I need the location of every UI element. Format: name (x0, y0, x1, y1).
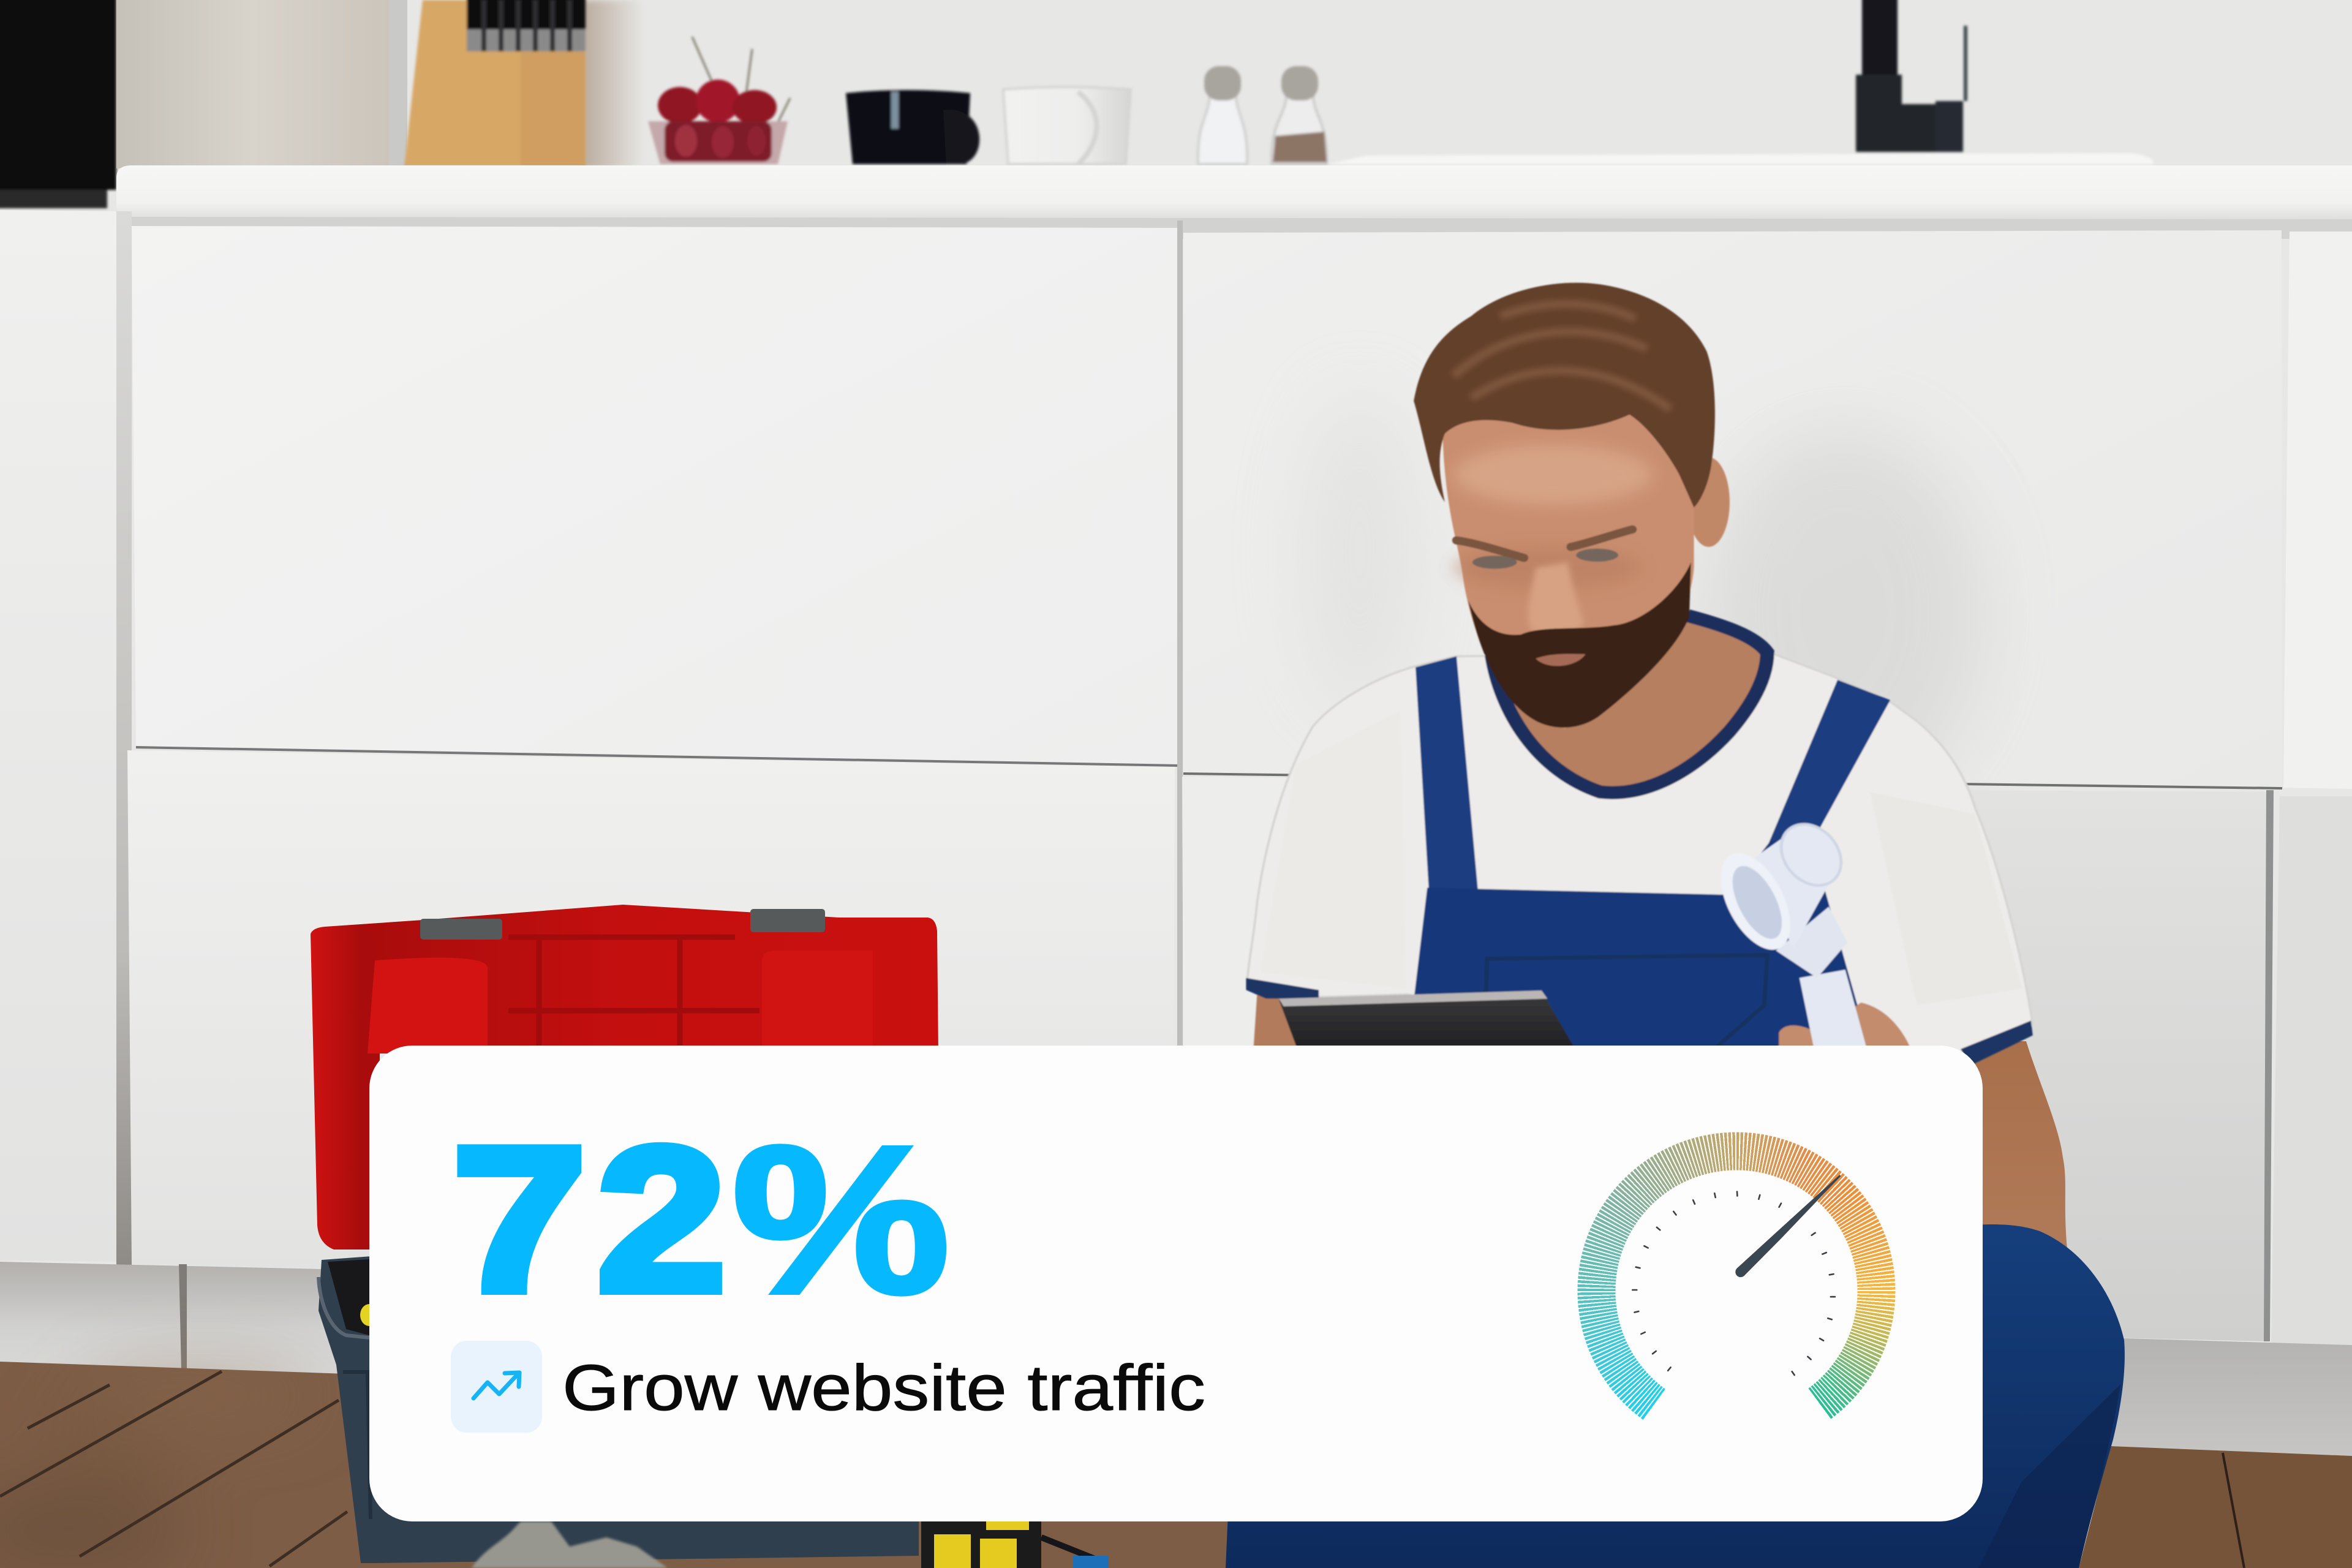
forehead highlight (1453, 445, 1653, 505)
right hand (1779, 1003, 1912, 1052)
left plinth (0, 1262, 380, 1376)
right arm (1960, 1041, 2067, 1250)
label text: Grow website traffic (562, 1352, 1205, 1424)
white mug (1003, 87, 1131, 164)
white pipe fitting (1706, 813, 1867, 1049)
gauge needle (1735, 1175, 1841, 1277)
big number: 7 (453, 1105, 586, 1333)
big number (453, 1102, 950, 1337)
glove (472, 1521, 668, 1568)
plumber upper body (1246, 283, 2033, 1076)
countertop (116, 165, 2352, 219)
left floor (0, 1362, 1286, 1568)
floor board seams (0, 1371, 347, 1566)
left cabinet column (0, 210, 121, 1262)
far right lower panel (2271, 796, 2352, 1346)
neck (1494, 611, 1767, 791)
hair (1414, 283, 1715, 508)
alcove edge (389, 0, 407, 168)
eyes (1472, 556, 1517, 569)
right seam (2264, 790, 2274, 1341)
horizontal panel gap right (1183, 774, 2282, 788)
panel: stat card (369, 1046, 1983, 1521)
right floor (2079, 1446, 2352, 1568)
eyebrows (1457, 529, 1632, 558)
beige alcove (116, 0, 389, 168)
gap under counter (116, 211, 2352, 239)
face (1442, 398, 1694, 729)
big number: 2 (597, 1105, 726, 1333)
black mug (846, 90, 979, 164)
person shadow on cabinets (1305, 392, 1985, 796)
lip (1536, 654, 1586, 666)
gauge colour ring (1577, 1132, 1896, 1420)
centre seam (1177, 221, 1183, 1047)
tape measure (921, 1521, 1109, 1568)
gauge scale ticks (1632, 1192, 1835, 1375)
big number: % (732, 1102, 950, 1337)
knife block shadow (582, 0, 643, 168)
overall bib (1408, 841, 1870, 1049)
left sleeve band (1246, 978, 1319, 999)
sink rim (1327, 153, 2154, 164)
upper left cabinet panel (132, 226, 1180, 764)
ear (1687, 457, 1730, 547)
trousers knee and leg (1226, 1224, 2125, 1568)
bib pocket (1486, 955, 1767, 1046)
pepper shaker (1272, 66, 1327, 164)
floor shading (0, 1375, 318, 1568)
far right upper panel (2283, 232, 2352, 789)
overall left strap (1415, 657, 1478, 893)
horizontal panel gap left (136, 747, 1180, 766)
right floor seam (2223, 1453, 2244, 1568)
icon: trending up arrow tile (451, 1341, 542, 1433)
beard (1468, 562, 1691, 728)
black faucet (1856, 0, 1967, 152)
overall right strap (1767, 680, 1890, 846)
salt shaker (1198, 66, 1247, 164)
upper right cabinet panel (1183, 230, 2282, 787)
knife block with knives (404, 0, 586, 167)
lower cabinet panel (127, 750, 1175, 1286)
eye socket shading (1453, 546, 1641, 590)
right plinth (2082, 1337, 2352, 1456)
right sleeve band (1961, 1020, 2033, 1066)
plinth seam (179, 1264, 187, 1370)
white t-shirt (1247, 652, 2033, 1076)
t-shirt shading (1260, 710, 2022, 1005)
left forearm (1253, 992, 1304, 1055)
lower centre cabinet panel (1182, 777, 1409, 1054)
toolbox base (318, 1256, 919, 1563)
red toolbox lid (311, 905, 938, 1250)
seam next to left column (116, 211, 132, 1268)
shirt collar (1491, 616, 1767, 793)
card text, icon and gauge details (451, 1102, 1841, 1433)
tablet (1279, 990, 1577, 1052)
lower right cabinet panel (1960, 790, 2274, 1341)
nose (1528, 562, 1584, 635)
black appliance (0, 0, 116, 208)
hair highlights (1453, 304, 1670, 409)
cherries in glass bowl (648, 37, 790, 164)
